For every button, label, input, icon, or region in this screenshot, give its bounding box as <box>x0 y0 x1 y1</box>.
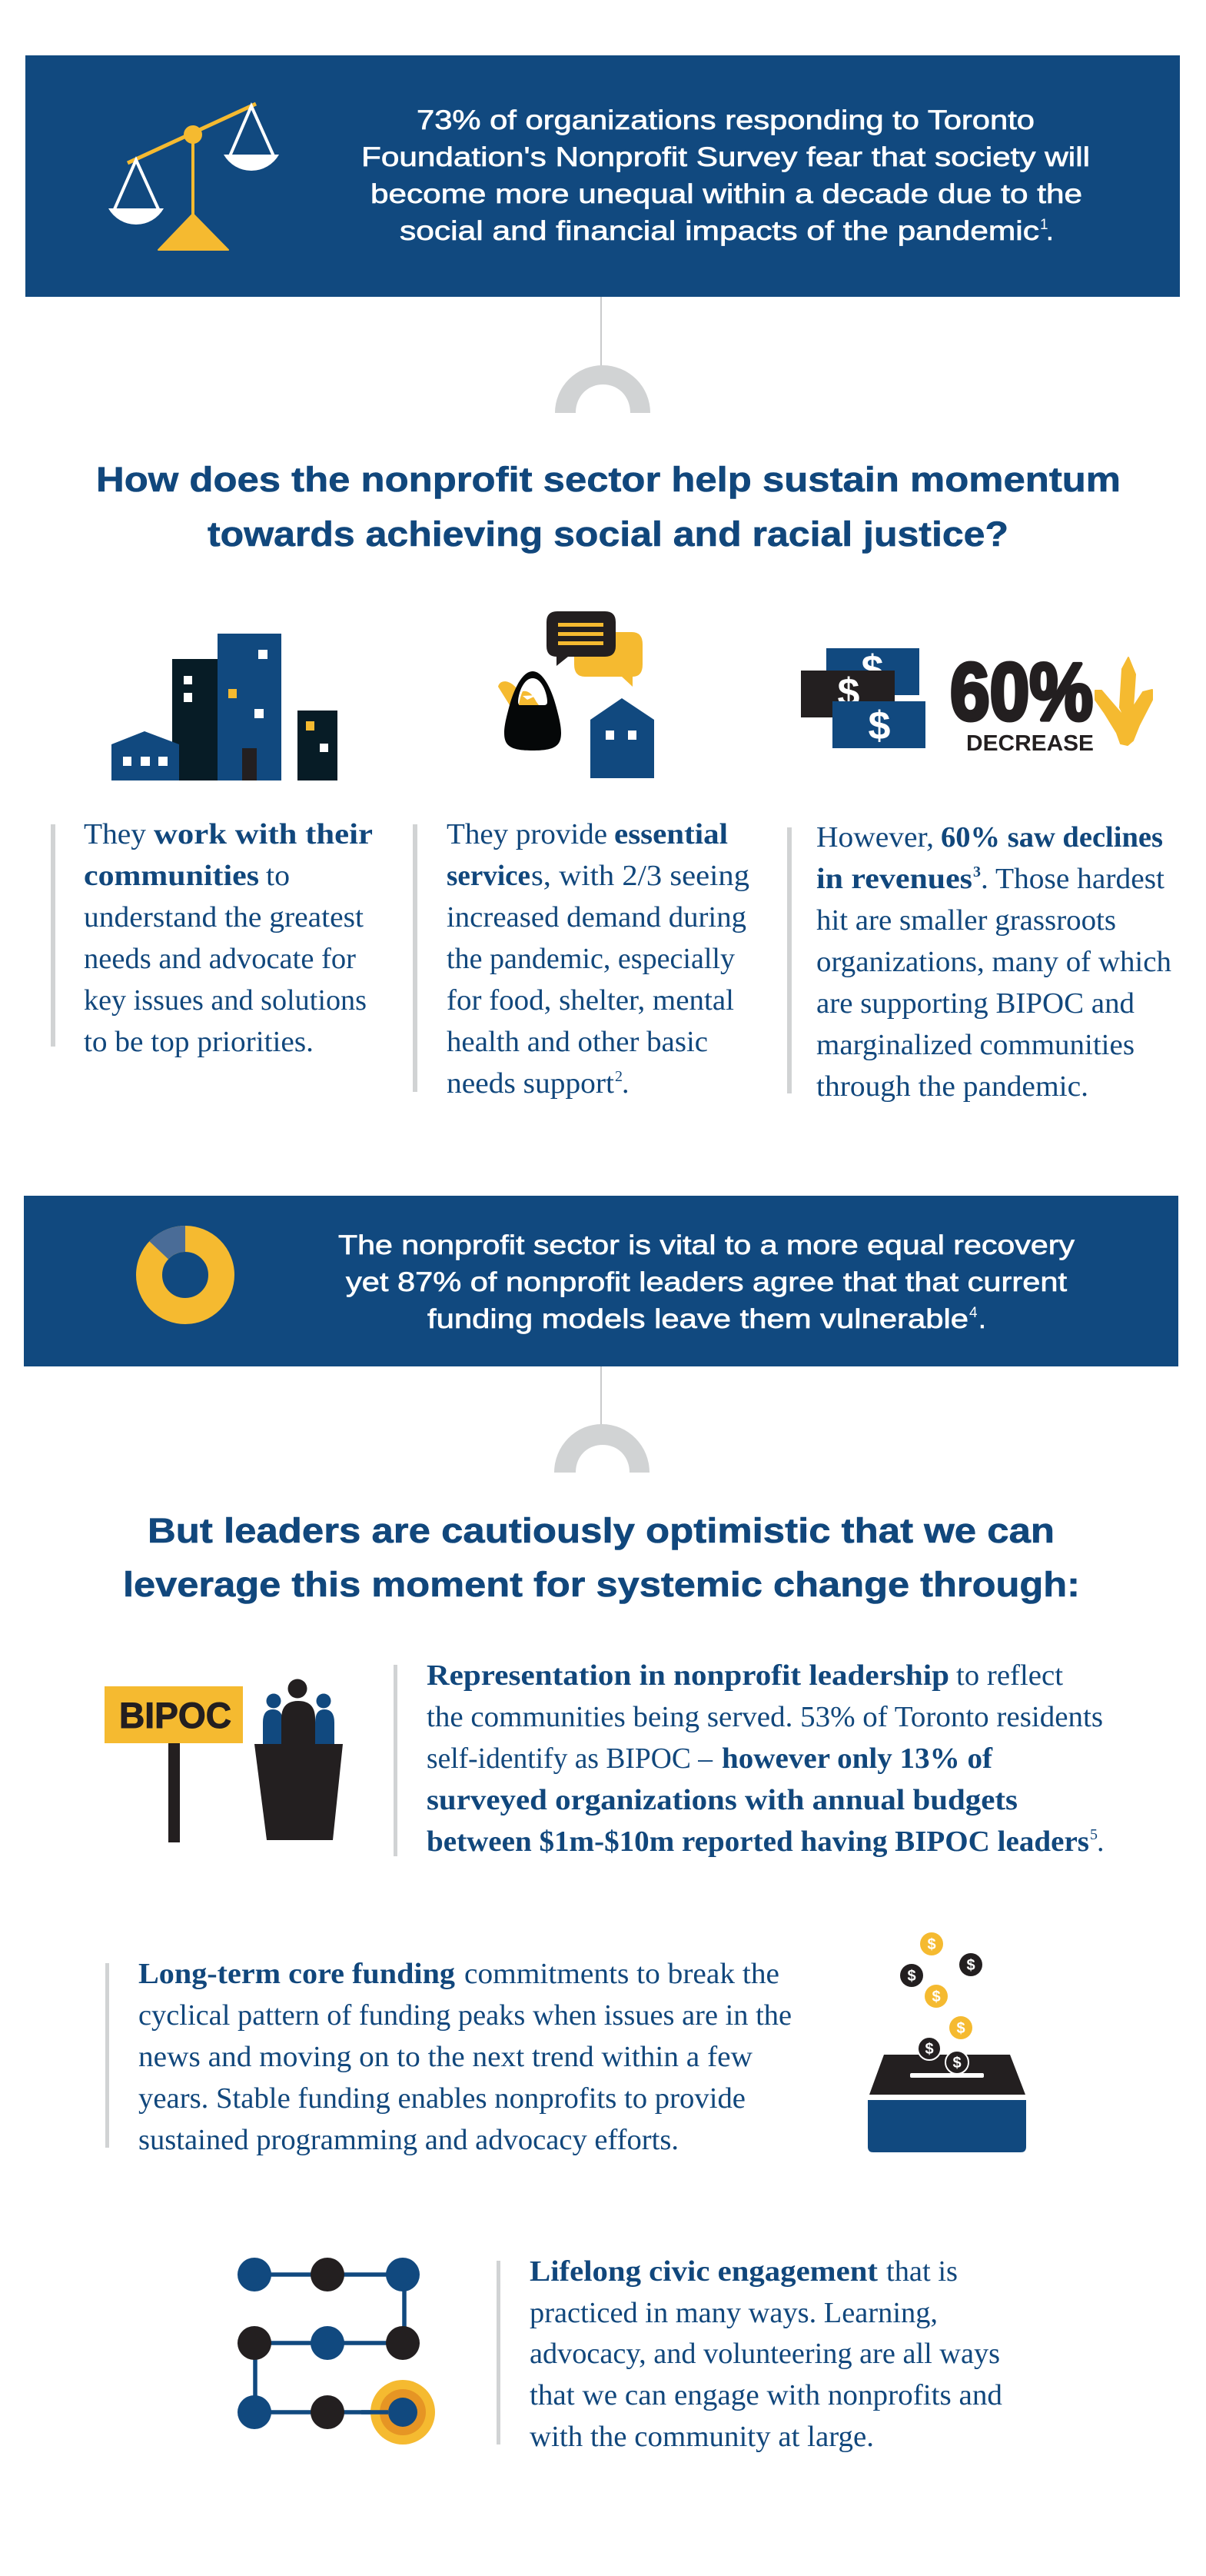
text block: representation in leadership: self-identify as BIPOC – <box>427 1742 713 1775</box>
text block: lifelong civic engagement: that is <box>886 2255 958 2288</box>
icon: money and 60 percent decrease: $ <box>838 671 860 715</box>
column: work with communities: to be top priorities. <box>84 1026 314 1058</box>
heading: leaders cautiously optimistic: leverage this moment for systemic change through: <box>123 1565 1080 1604</box>
text: second banner statement: 4 <box>969 1305 978 1321</box>
heading: leaders cautiously optimistic: But leaders are cautiously optimistic that we can <box>148 1511 1055 1550</box>
text block: representation in leadership <box>394 1659 1104 1858</box>
icon: donation box with coins: $ <box>966 1957 975 1974</box>
text: top banner statement: 1 <box>1040 217 1048 233</box>
connector: line and arch two <box>554 1366 650 1473</box>
text block: lifelong civic engagement <box>497 2255 1002 2453</box>
column: work with communities: key issues and solutions <box>84 984 367 1017</box>
icon: donation box with coins <box>868 1932 1026 2152</box>
icon: donation box with coins: $ <box>952 2055 962 2072</box>
connector: line and arch one <box>555 297 650 413</box>
text: top banner statement <box>361 105 1090 246</box>
column: revenue declines: are supporting BIPOC and <box>816 987 1135 1020</box>
column: essential services: service <box>447 860 530 892</box>
text block: long-term core funding: Long-term core funding <box>138 1958 455 1990</box>
column: work with communities: communities <box>84 860 259 892</box>
text block: long-term core funding <box>105 1958 792 2156</box>
column: essential services: They provide <box>447 818 607 850</box>
column: essential services: s, with 2/3 seeing <box>531 860 749 892</box>
column: essential services <box>413 818 749 1100</box>
column: work with communities <box>51 818 373 1058</box>
text block: lifelong civic engagement: practiced in many ways. Learning, <box>530 2297 938 2329</box>
column: essential services: health and other basic <box>447 1026 708 1058</box>
text block: representation in leadership: however only 13% of <box>722 1742 993 1775</box>
column: essential services: needs support <box>447 1067 614 1100</box>
icon: BIPOC sign and leaders at podium <box>105 1679 343 1842</box>
column: revenue declines: in revenues <box>816 863 972 895</box>
text block: representation in leadership: 5 <box>1090 1826 1098 1843</box>
column: work with communities: They <box>84 818 146 850</box>
text block: lifelong civic engagement: with the community at large. <box>530 2421 874 2453</box>
text block: long-term core funding: sustained programming and advocacy efforts. <box>138 2124 679 2156</box>
column: essential services: for food, shelter, mental <box>447 984 734 1017</box>
icon: donation box with coins: $ <box>907 1968 916 1985</box>
text block: long-term core funding: news and moving on to the next trend within a few <box>138 2041 753 2073</box>
heading: how does the sector help <box>96 460 1121 554</box>
icon: BIPOC sign and leaders at podium: BIPOC <box>119 1695 231 1736</box>
column: revenue declines: 3 <box>973 864 981 880</box>
column: revenue declines: 60% saw declines <box>941 821 1163 854</box>
text: top banner statement: 73% of organizations responding to Toronto <box>417 105 1035 135</box>
icon: donation box with coins: $ <box>925 2041 934 2058</box>
text: second banner statement: funding models leave them vulnerable <box>427 1304 968 1334</box>
text: second banner statement: . <box>978 1304 986 1334</box>
heading: how does the sector help: towards achieving social and racial justice? <box>208 514 1008 554</box>
column: revenue declines: organizations, many of which <box>816 946 1171 978</box>
column: revenue declines <box>787 821 1171 1103</box>
text block: representation in leadership: between $1m-$10m reported having BIPOC leaders <box>427 1825 1089 1858</box>
text block: lifelong civic engagement: that we can engage with nonprofits and <box>530 2379 1002 2411</box>
text block: long-term core funding: years. Stable funding enables nonprofits to provide <box>138 2082 746 2115</box>
icon: donation box with coins: $ <box>956 2020 965 2037</box>
icon: donation box with coins: $ <box>932 1989 941 2005</box>
icon: balance scales <box>108 104 279 250</box>
text: top banner statement: . <box>1046 216 1054 246</box>
column: revenue declines: . Those hardest <box>981 863 1164 895</box>
icon: money and 60 percent decrease <box>801 647 1152 756</box>
column: work with communities: to <box>266 860 290 892</box>
column: work with communities: work with their <box>154 818 373 850</box>
column: revenue declines: marginalized communities <box>816 1029 1135 1061</box>
text block: representation in leadership: . <box>1097 1825 1104 1858</box>
icon: yellow down arrow <box>1095 657 1152 745</box>
column: essential services: increased demand during <box>447 901 746 934</box>
text: second banner statement <box>338 1230 1075 1334</box>
text block: lifelong civic engagement: advocacy, and volunteering are all ways <box>530 2338 1000 2370</box>
icon: money and 60 percent decrease: $ <box>869 704 891 748</box>
text block: long-term core funding: cyclical pattern of funding peaks when issues are in the <box>138 1999 792 2032</box>
column: work with communities: understand the greatest <box>84 901 364 934</box>
column: revenue declines: However, <box>816 821 934 854</box>
text block: long-term core funding: commitments to break the <box>464 1958 779 1990</box>
text block: representation in leadership: to reflect <box>956 1659 1063 1692</box>
heading: how does the sector help: How does the nonprofit sector help sustain momentum <box>96 460 1121 499</box>
text block: representation in leadership: surveyed organizations with annual budgets <box>427 1784 1018 1816</box>
column: essential services: 2 <box>615 1068 623 1085</box>
heading: leaders cautiously optimistic <box>123 1511 1080 1604</box>
column: revenue declines: through the pandemic. <box>816 1070 1088 1103</box>
column: essential services: essential <box>614 818 728 850</box>
icon: donation box with coins: $ <box>927 1936 936 1953</box>
icon: city buildings <box>111 634 337 780</box>
icon: essential services <box>498 611 654 778</box>
icon: money and 60 percent decrease: $ <box>862 647 884 692</box>
text: decrease: DECREASE <box>966 731 1094 756</box>
text block: lifelong civic engagement: Lifelong civic engagement <box>530 2255 878 2288</box>
text block: representation in leadership: the communities being served. 53% of Toronto residents <box>427 1701 1103 1733</box>
text: top banner statement: social and financial impacts of the pandemic <box>400 216 1039 246</box>
text: 60 percent: 60% <box>950 647 1093 737</box>
chart: 87 percent donut <box>149 1226 221 1311</box>
column: essential services: the pandemic, especially <box>447 943 735 975</box>
column: work with communities: needs and advocate for <box>84 943 356 975</box>
icon: connected node path <box>238 2258 435 2445</box>
text block: representation in leadership: Representation in nonprofit leadership <box>427 1659 949 1692</box>
text: second banner statement: yet 87% of nonprofit leaders agree that that current <box>346 1267 1067 1297</box>
panel: top banner <box>25 55 1180 297</box>
column: essential services: . <box>622 1067 629 1100</box>
text: top banner statement: become more unequal within a decade due to the <box>370 179 1082 209</box>
text: top banner statement: Foundation's Nonprofit Survey fear that society will <box>361 142 1090 172</box>
column: revenue declines: hit are smaller grassroots <box>816 904 1116 937</box>
panel: second banner <box>24 1196 1178 1366</box>
text: second banner statement: The nonprofit sector is vital to a more equal recovery <box>338 1230 1075 1260</box>
